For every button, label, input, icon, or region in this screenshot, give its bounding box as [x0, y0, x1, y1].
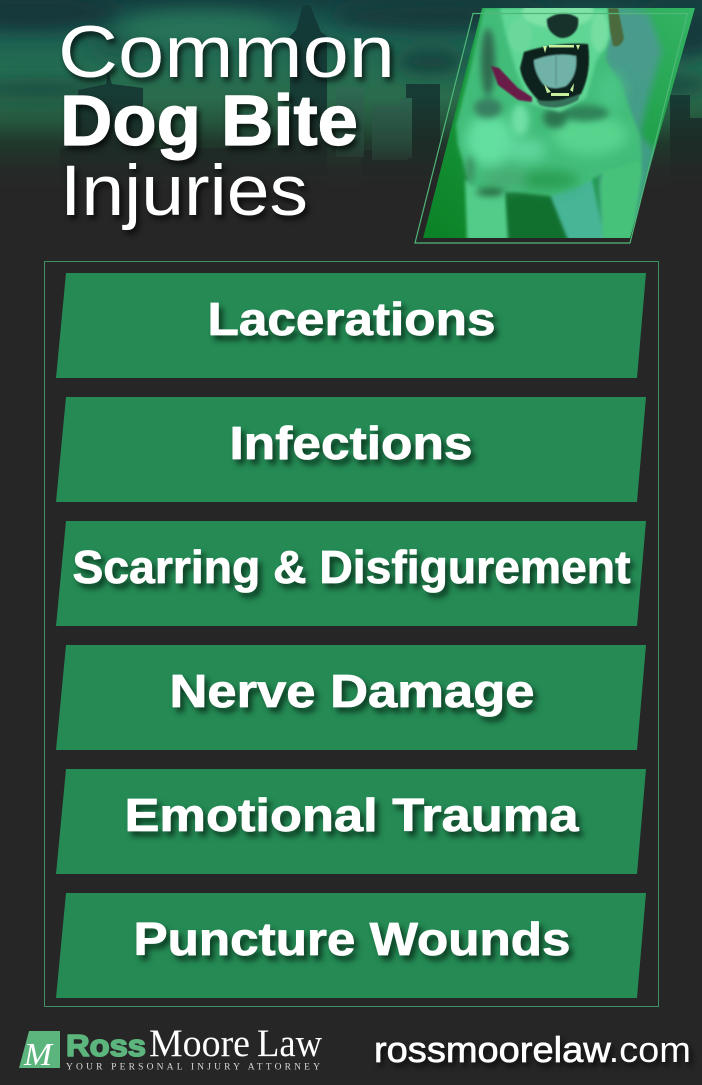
list frame: [44, 262, 658, 1006]
nose: [547, 13, 578, 38]
bar: Scarring & Disfigurement: [56, 521, 646, 626]
title: [58, 12, 395, 231]
teeth: [543, 45, 580, 96]
logo mark: [19, 1031, 60, 1072]
tongue: [534, 55, 576, 88]
bar: Lacerations: Lacerations: [208, 293, 496, 345]
bar: Puncture Wounds: Puncture Wounds: [134, 913, 570, 965]
bar: Puncture Wounds: [56, 893, 646, 998]
bar: Infections: Infections: [230, 417, 472, 469]
logo: Ross Moore Law: [19, 1022, 322, 1072]
title line: Common: Common: [58, 12, 395, 93]
bar: Lacerations: [56, 273, 646, 378]
bar: Emotional Trauma: [56, 769, 646, 874]
skyline background photo: [0, 0, 702, 198]
website url: rossmoorelaw .com: [374, 1029, 691, 1070]
bar: Scarring & Disfigurement: Scarring & Disfigurement: [72, 541, 630, 593]
lower jaw: [536, 94, 580, 108]
collar: [491, 66, 532, 102]
dog photo outline frame: [415, 14, 688, 243]
bar: Nerve Damage: [56, 645, 646, 750]
bar: Infections: [56, 397, 646, 502]
logo wordmark: Ross: [66, 1028, 146, 1063]
logo wordmark: Moore: [149, 1022, 250, 1065]
mouth: [520, 44, 589, 105]
title line: Injuries: Injuries: [60, 152, 308, 231]
muzzle: [500, 8, 610, 112]
background between legs: [505, 190, 570, 238]
logo wordmark: Law: [257, 1022, 322, 1065]
logo wordmark: [66, 1022, 322, 1065]
title line: Dog Bite: Dog Bite: [60, 82, 358, 161]
bar: Nerve Damage: Nerve Damage: [170, 665, 534, 717]
bar: Emotional Trauma: Emotional Trauma: [124, 789, 579, 841]
ear: [608, 8, 624, 46]
logo mark: M: [23, 1036, 54, 1072]
dog photo: [423, 0, 695, 245]
logo tagline: YOUR PERSONAL INJURY ATTORNEY: [66, 1062, 320, 1072]
